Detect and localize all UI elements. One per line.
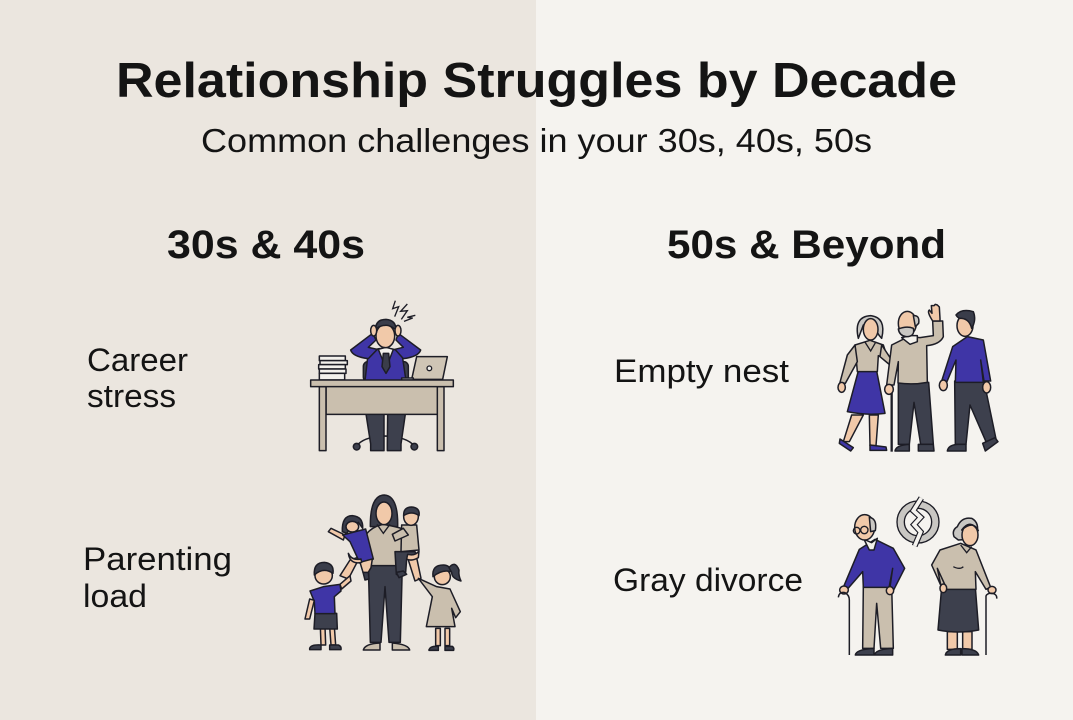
woman skirt bbox=[847, 371, 885, 414]
chair back bbox=[363, 362, 408, 382]
stress bolts bbox=[393, 301, 415, 321]
broken ring bbox=[901, 498, 935, 546]
woman legs bbox=[947, 632, 972, 649]
man legs bbox=[863, 586, 893, 648]
head bbox=[376, 324, 395, 348]
mother torso bbox=[366, 524, 403, 566]
desk bbox=[326, 386, 438, 414]
son head bbox=[957, 315, 973, 336]
boy on arm bbox=[395, 552, 418, 577]
waving hand bbox=[929, 304, 940, 321]
heading: 30s & 40s: 30s & 40s bbox=[167, 223, 365, 267]
woman head bbox=[857, 316, 883, 338]
man cane bbox=[838, 592, 849, 655]
woman head bbox=[953, 518, 978, 540]
title: Relationship Struggles by Decade bbox=[116, 54, 957, 108]
man head bbox=[855, 515, 875, 540]
label: Empty nest: Empty nest bbox=[614, 353, 789, 389]
label: Career stress: Career bbox=[87, 342, 188, 378]
woman torso bbox=[932, 543, 991, 589]
girl on arm bbox=[328, 528, 345, 540]
woman cane bbox=[986, 593, 997, 655]
grandfather head bbox=[898, 311, 916, 335]
woman skirt bbox=[938, 587, 979, 632]
label: Gray divorce: Gray divorce bbox=[613, 562, 803, 598]
cane bbox=[888, 392, 895, 452]
mother legs bbox=[368, 565, 402, 642]
man torso bbox=[843, 539, 905, 590]
label: Parenting load: load bbox=[83, 578, 147, 614]
label: Career stress: stress bbox=[87, 378, 176, 414]
laptop bbox=[412, 357, 447, 379]
mother arms bbox=[340, 557, 360, 579]
grandfather torso bbox=[887, 321, 943, 385]
subtitle: Common challenges in your 30s, 40s, 50s bbox=[201, 122, 872, 159]
label: Parenting load: Parenting bbox=[83, 541, 232, 577]
woman back arm & legs bbox=[843, 415, 878, 446]
chair base bbox=[357, 436, 414, 446]
torso bbox=[365, 348, 406, 381]
girl standing bbox=[436, 628, 450, 646]
icon: mother with three children bbox=[305, 495, 461, 650]
books bbox=[319, 356, 345, 361]
heading: 50s & Beyond: 50s & Beyond bbox=[667, 223, 946, 267]
boy standing bbox=[320, 627, 336, 645]
son legs bbox=[955, 381, 996, 444]
legs bbox=[366, 414, 405, 451]
grandfather legs bbox=[898, 382, 933, 444]
icon: separated elderly couple with broken ring bbox=[838, 498, 997, 655]
arms bbox=[351, 333, 377, 359]
mother hair bbox=[370, 495, 398, 527]
mother shoes bbox=[363, 643, 410, 650]
woman torso bbox=[855, 340, 888, 372]
son torso bbox=[942, 337, 991, 382]
icon: stressed worker at desk bbox=[311, 301, 453, 451]
glasses bbox=[853, 527, 860, 534]
icon: elderly couple with adult son bbox=[838, 304, 998, 452]
mother face bbox=[376, 502, 392, 525]
